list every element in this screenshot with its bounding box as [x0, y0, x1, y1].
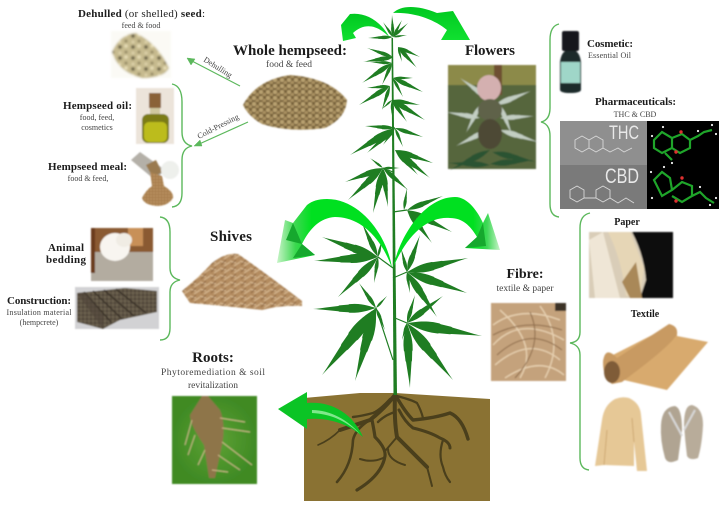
- label: construction: (hempcrete): [20, 318, 59, 327]
- label: hempseed meal: [48, 161, 127, 183]
- photo: whole hempseed pile: [243, 75, 347, 130]
- label: roots: Roots:: [192, 350, 234, 366]
- photo: hempseed oil: [136, 88, 174, 144]
- upper foliage: [344, 15, 454, 245]
- label: dehulled seed: [78, 8, 205, 30]
- label: animal bedding: [46, 242, 86, 266]
- label: hempseed meal: Hempseed meal:: [48, 161, 127, 173]
- photo: THC and CBD molecules: CBD: [605, 165, 639, 188]
- label: pharmaceuticals: Pharmaceuticals:: [595, 96, 676, 108]
- label: cold-pressing: Cold-Pressing: [196, 112, 240, 141]
- photo: sweater: [595, 397, 647, 471]
- photo: animal bedding: [91, 228, 153, 281]
- photo: paper: [589, 232, 673, 298]
- plant roots: [318, 395, 468, 490]
- label: textile: Textile: [631, 309, 660, 320]
- label: fibre: [497, 267, 554, 294]
- label: roots: [161, 350, 265, 391]
- photo: dehulled seed: [111, 31, 171, 78]
- label: construction: Insulation material: [6, 308, 72, 317]
- leaf: lower right: [401, 293, 483, 388]
- leaf: upper right: [399, 234, 469, 319]
- arrow: to flowers: [393, 7, 470, 40]
- brackets: [160, 24, 590, 470]
- label: fibre: Fibre:: [506, 267, 544, 282]
- label: cosmetic: Cosmetic:: [587, 38, 633, 50]
- process arrows: [187, 58, 248, 146]
- photo: flowers: [446, 65, 539, 173]
- label: dehulling: Dehulling: [202, 55, 234, 80]
- leaf: upper left: [314, 222, 383, 300]
- label: animal bedding: bedding: [46, 254, 86, 266]
- photo: roots: [172, 396, 257, 484]
- label: dehulled seed: feed & food: [122, 21, 160, 30]
- label: cosmetic: Essential Oil: [588, 51, 632, 60]
- label: cosmetic: [587, 38, 633, 60]
- label: animal bedding: Animal: [48, 242, 84, 254]
- leaf: lower left: [313, 282, 388, 382]
- arrow: to roots: [278, 392, 363, 437]
- label: hempseed oil: food, feed,: [80, 113, 114, 122]
- label: whole hempseed: food & feed: [266, 59, 312, 70]
- label: pharmaceuticals: THC & CBD: [614, 110, 657, 119]
- photo: THC and CBD molecules: [560, 121, 719, 209]
- photo: textile roll: [603, 324, 708, 390]
- photo: flip flops: [661, 405, 703, 462]
- soil block: [304, 393, 490, 501]
- arrow: to whole hempseed: [341, 14, 390, 41]
- label: hempseed oil: cosmetics: [81, 123, 113, 132]
- photo: shives pile: [182, 254, 302, 310]
- arrow: to fibre: [393, 197, 500, 268]
- label: hempseed oil: Hempseed oil:: [63, 100, 132, 112]
- photo: hempseed meal: [131, 152, 179, 206]
- photo: THC and CBD molecules: THC: [609, 123, 639, 144]
- arrow: to shives: [277, 199, 392, 268]
- label: hempseed meal: food & feed,: [68, 174, 108, 183]
- label: construction: Construction:: [7, 295, 71, 307]
- label: roots: Phytoremediation & soil: [161, 368, 265, 378]
- label: dehulled seed: Dehulled (or shelled) seed:: [78, 8, 205, 20]
- label: fibre: textile & paper: [497, 284, 554, 294]
- label: roots: revitalization: [188, 381, 238, 391]
- label: paper: Paper: [614, 217, 640, 228]
- label: pharmaceuticals: [595, 96, 676, 119]
- label: construction: [6, 295, 72, 327]
- label: flowers: Flowers: [465, 43, 515, 59]
- photo: fibre: [491, 303, 566, 381]
- label: shives: Shives: [210, 229, 252, 245]
- label: whole hempseed: Whole hempseed:: [233, 43, 347, 59]
- label: hempseed oil: [63, 100, 132, 132]
- photo: construction hempcrete blocks: [75, 287, 159, 329]
- plant stem and leaves: [313, 15, 483, 395]
- label: whole hempseed: [233, 43, 347, 70]
- photo: essential oil bottle: [560, 31, 581, 93]
